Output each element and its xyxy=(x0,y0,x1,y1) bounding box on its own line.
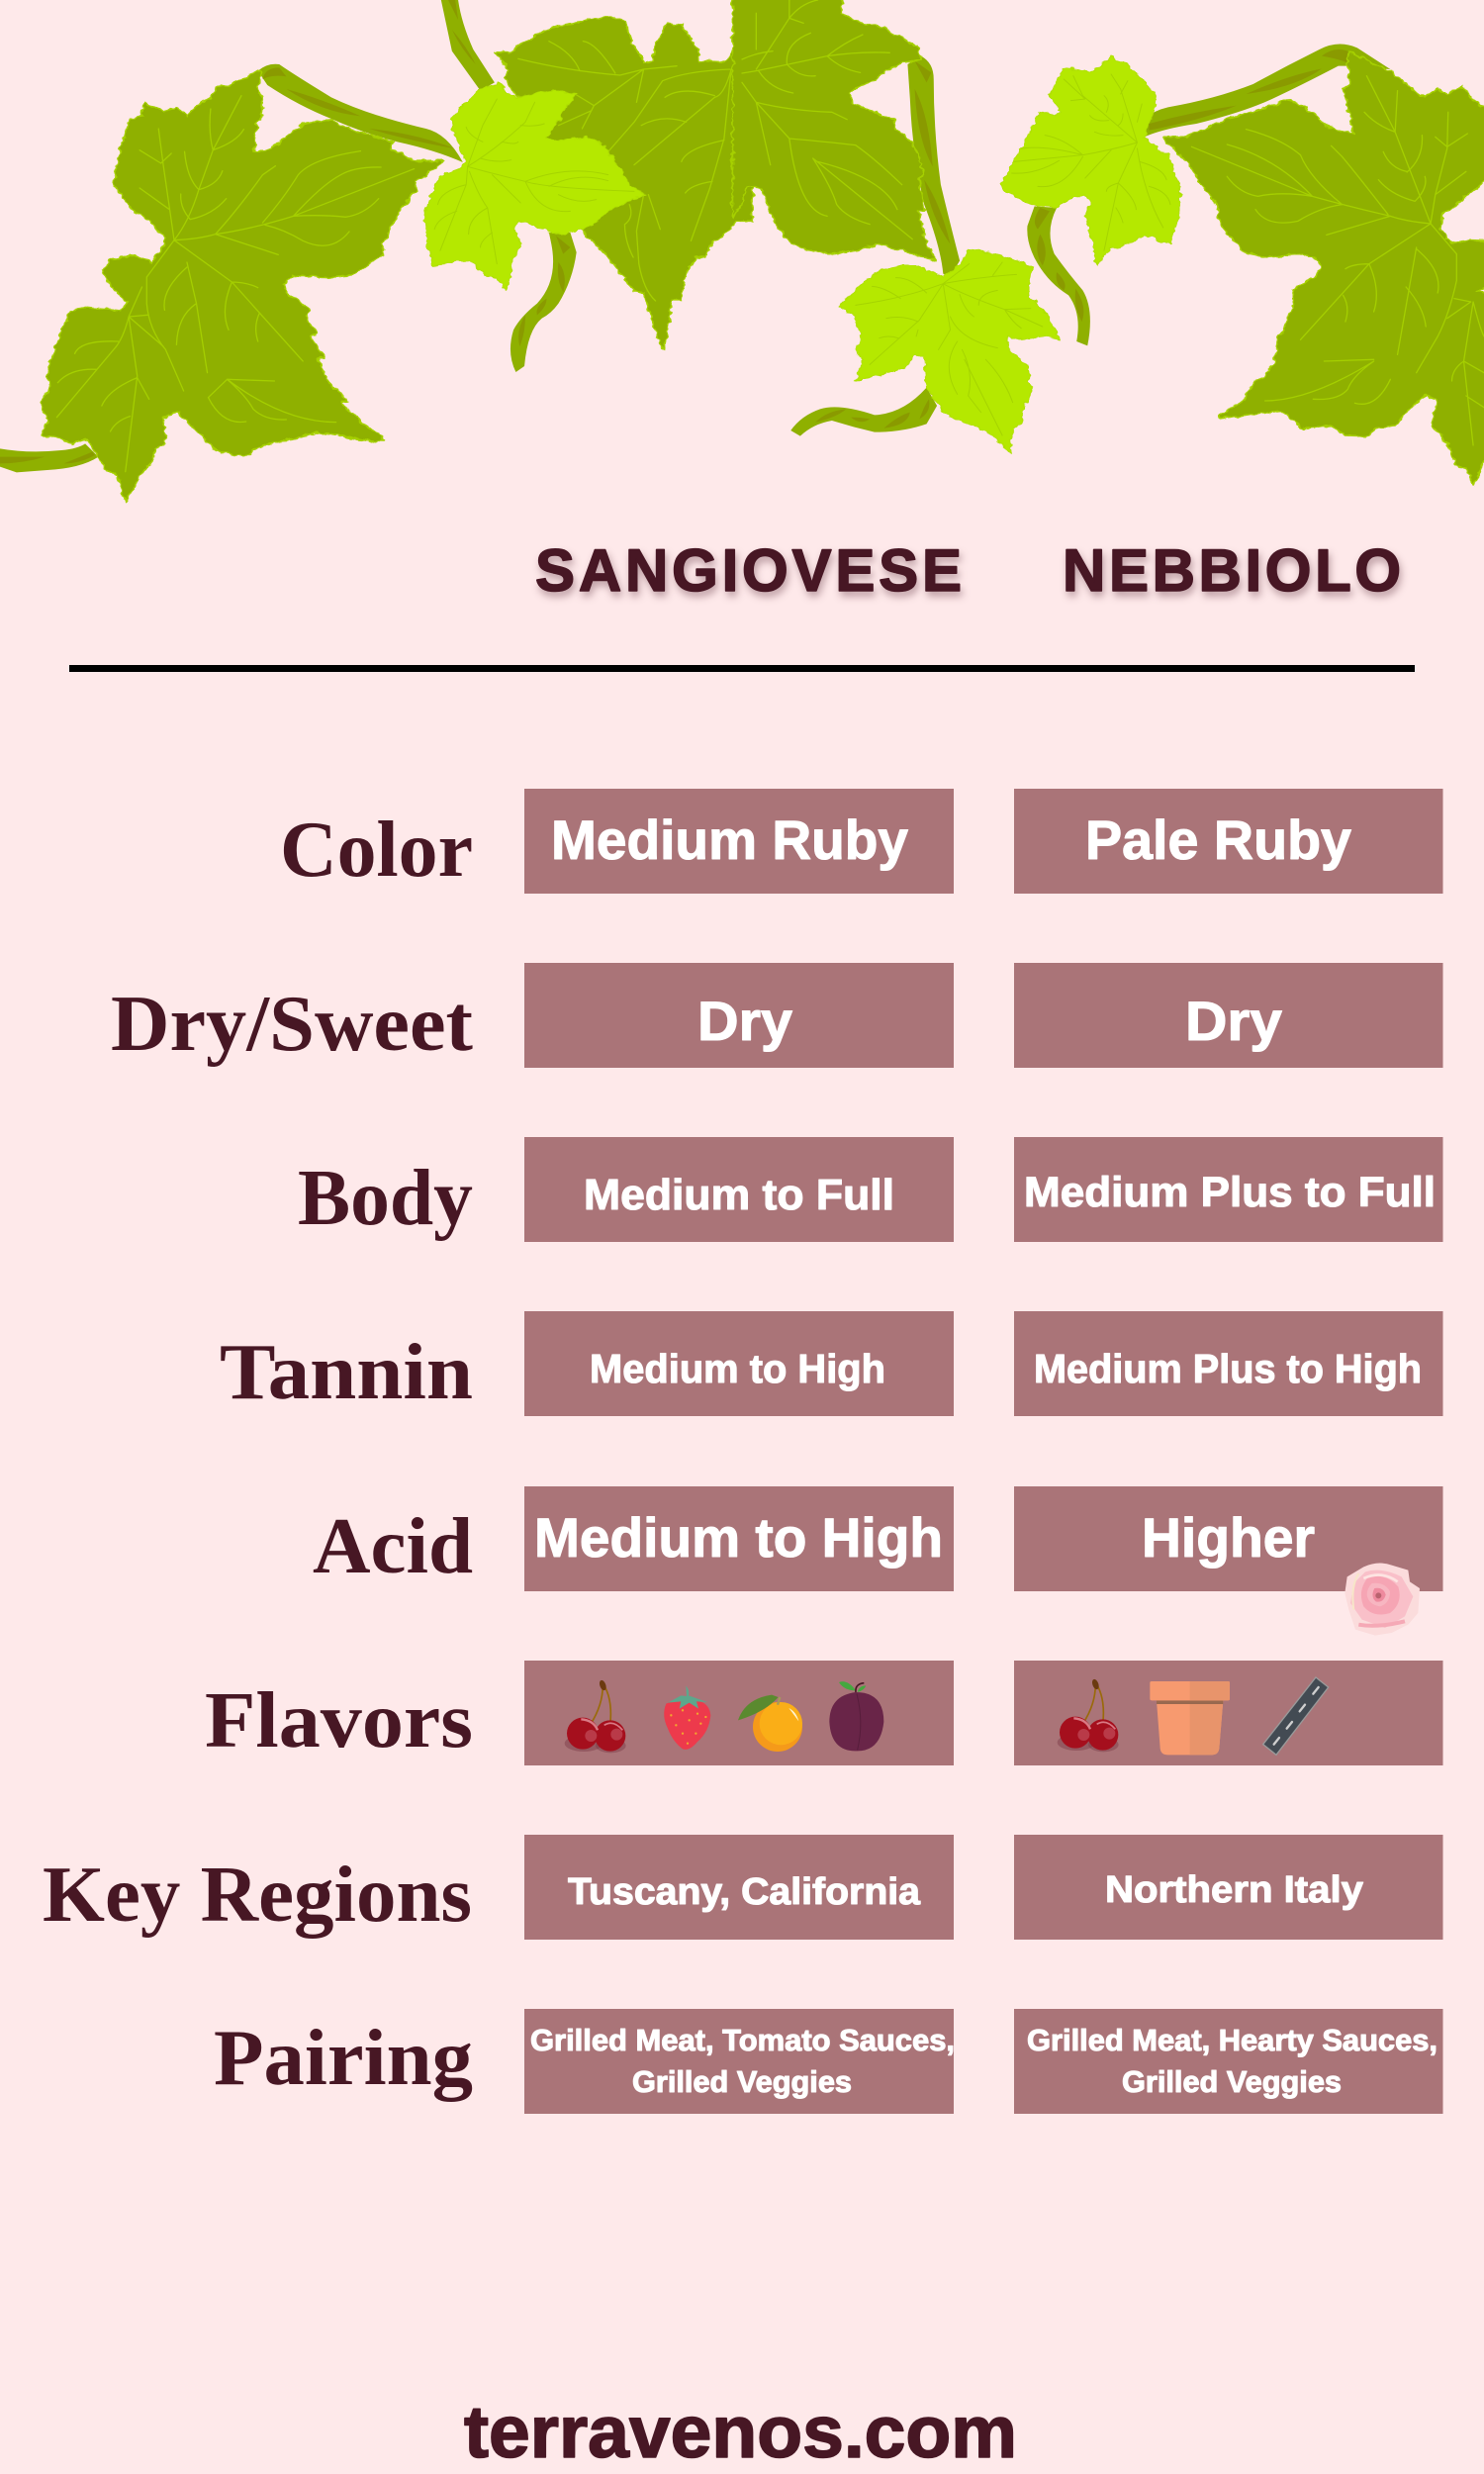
value: Nebbiolo pairing text: Grilled Veggies xyxy=(1122,2064,1342,2099)
value: Pale Ruby: Pale Ruby xyxy=(1085,809,1351,871)
cell: Nebbiolo body xyxy=(1014,1137,1442,1242)
value: Higher: Higher xyxy=(1142,1506,1315,1569)
cell: Nebbiolo regions xyxy=(1014,1835,1442,1940)
cell: Sangiovese color xyxy=(524,789,954,894)
row: Key Regions xyxy=(43,1835,1442,1940)
column heading: Nebbiolo: NEBBIOLO xyxy=(1063,537,1401,604)
icon: orange xyxy=(738,1695,802,1752)
label: Pairing: Pairing xyxy=(214,2015,473,2102)
value: Sangiovese pairing text: Grilled Meat, Tomato Sauces, xyxy=(530,2023,955,2057)
value: Dry: Dry xyxy=(697,990,792,1052)
label: Flavors: Flavors xyxy=(205,1677,473,1764)
cell: Sangiovese regions xyxy=(524,1835,954,1940)
column heading: Sangiovese: SANGIOVESE xyxy=(535,537,962,604)
icon: terracotta pot xyxy=(1150,1681,1230,1755)
cell: Nebbiolo pairing xyxy=(1014,2009,1442,2114)
stems and tendrils, right xyxy=(790,45,1390,436)
value: Medium to High: Medium to High xyxy=(534,1506,943,1569)
value: Medium to Full: Medium to Full xyxy=(584,1171,894,1219)
value: Northern Italy: Northern Italy xyxy=(1105,1869,1363,1911)
label: Tannin: Tannin xyxy=(220,1329,473,1416)
cell: Nebbiolo color xyxy=(1014,789,1442,894)
value: Nebbiolo pairing text: Grilled Meat, Hearty Sauces, xyxy=(1027,2023,1438,2057)
row: Acid xyxy=(313,1486,1442,1591)
label: Body: Body xyxy=(298,1155,473,1242)
left half of vine xyxy=(0,0,753,502)
cell: Nebbiolo acid xyxy=(1014,1486,1442,1591)
value: Nebbiolo pairing text xyxy=(1027,2023,1438,2099)
centre leaf, right part xyxy=(732,0,936,260)
value: Medium Plus to High: Medium Plus to High xyxy=(1034,1346,1422,1391)
row: Flavors xyxy=(205,1661,1442,1765)
big left leaf xyxy=(41,70,444,502)
right half of vine xyxy=(732,0,1484,485)
label: Key Regions: Key Regions xyxy=(43,1852,472,1939)
big right leaf xyxy=(1163,51,1484,485)
row: Body xyxy=(298,1137,1442,1242)
illustration: grape vine with leaves xyxy=(0,0,1484,502)
label: Color: Color xyxy=(280,807,473,894)
value: Tuscany, California: Tuscany, California xyxy=(568,1871,921,1913)
row: Dry/Sweet xyxy=(111,963,1442,1068)
row: Tannin xyxy=(220,1311,1442,1416)
cell: Sangiovese tannin xyxy=(524,1311,954,1416)
row: Pairing xyxy=(214,2009,1442,2114)
cell: Nebbiolo flavors xyxy=(1014,1661,1442,1765)
cell: Sangiovese sweetness xyxy=(524,963,954,1068)
value: Sangiovese pairing text: Grilled Veggies xyxy=(632,2064,852,2099)
cell: Sangiovese pairing xyxy=(524,2009,954,2114)
cell: Sangiovese acid xyxy=(524,1486,954,1591)
icon: asphalt road xyxy=(1263,1677,1329,1755)
value: Medium to High: Medium to High xyxy=(590,1346,885,1391)
row: Color xyxy=(280,789,1442,894)
icon: plum xyxy=(829,1681,883,1751)
footer: website: terravenos.com xyxy=(464,2391,1017,2473)
centre leaf, left part xyxy=(495,16,753,349)
value: Dry: Dry xyxy=(1185,990,1282,1052)
value: Medium Plus to Full: Medium Plus to Full xyxy=(1024,1169,1436,1216)
bright leaf, left xyxy=(424,82,646,291)
icon: pink rose xyxy=(1345,1564,1420,1636)
cell: Sangiovese flavors xyxy=(524,1661,954,1765)
icon: cherries xyxy=(565,1679,626,1753)
icon: strawberry xyxy=(664,1685,710,1750)
value: Medium Ruby: Medium Ruby xyxy=(551,809,908,871)
stems and tendrils, left xyxy=(0,0,577,472)
bright leaf, bottom centre xyxy=(839,249,1060,454)
icon: cherries xyxy=(1058,1678,1119,1752)
bright leaf, right xyxy=(1001,55,1179,265)
value: Sangiovese pairing text xyxy=(530,2023,955,2099)
label: Acid: Acid xyxy=(313,1503,473,1590)
cell: Nebbiolo tannin xyxy=(1014,1311,1442,1416)
cell: Nebbiolo sweetness xyxy=(1014,963,1442,1068)
cell: Sangiovese body xyxy=(524,1137,954,1242)
label: Dry/Sweet: Dry/Sweet xyxy=(111,981,473,1068)
